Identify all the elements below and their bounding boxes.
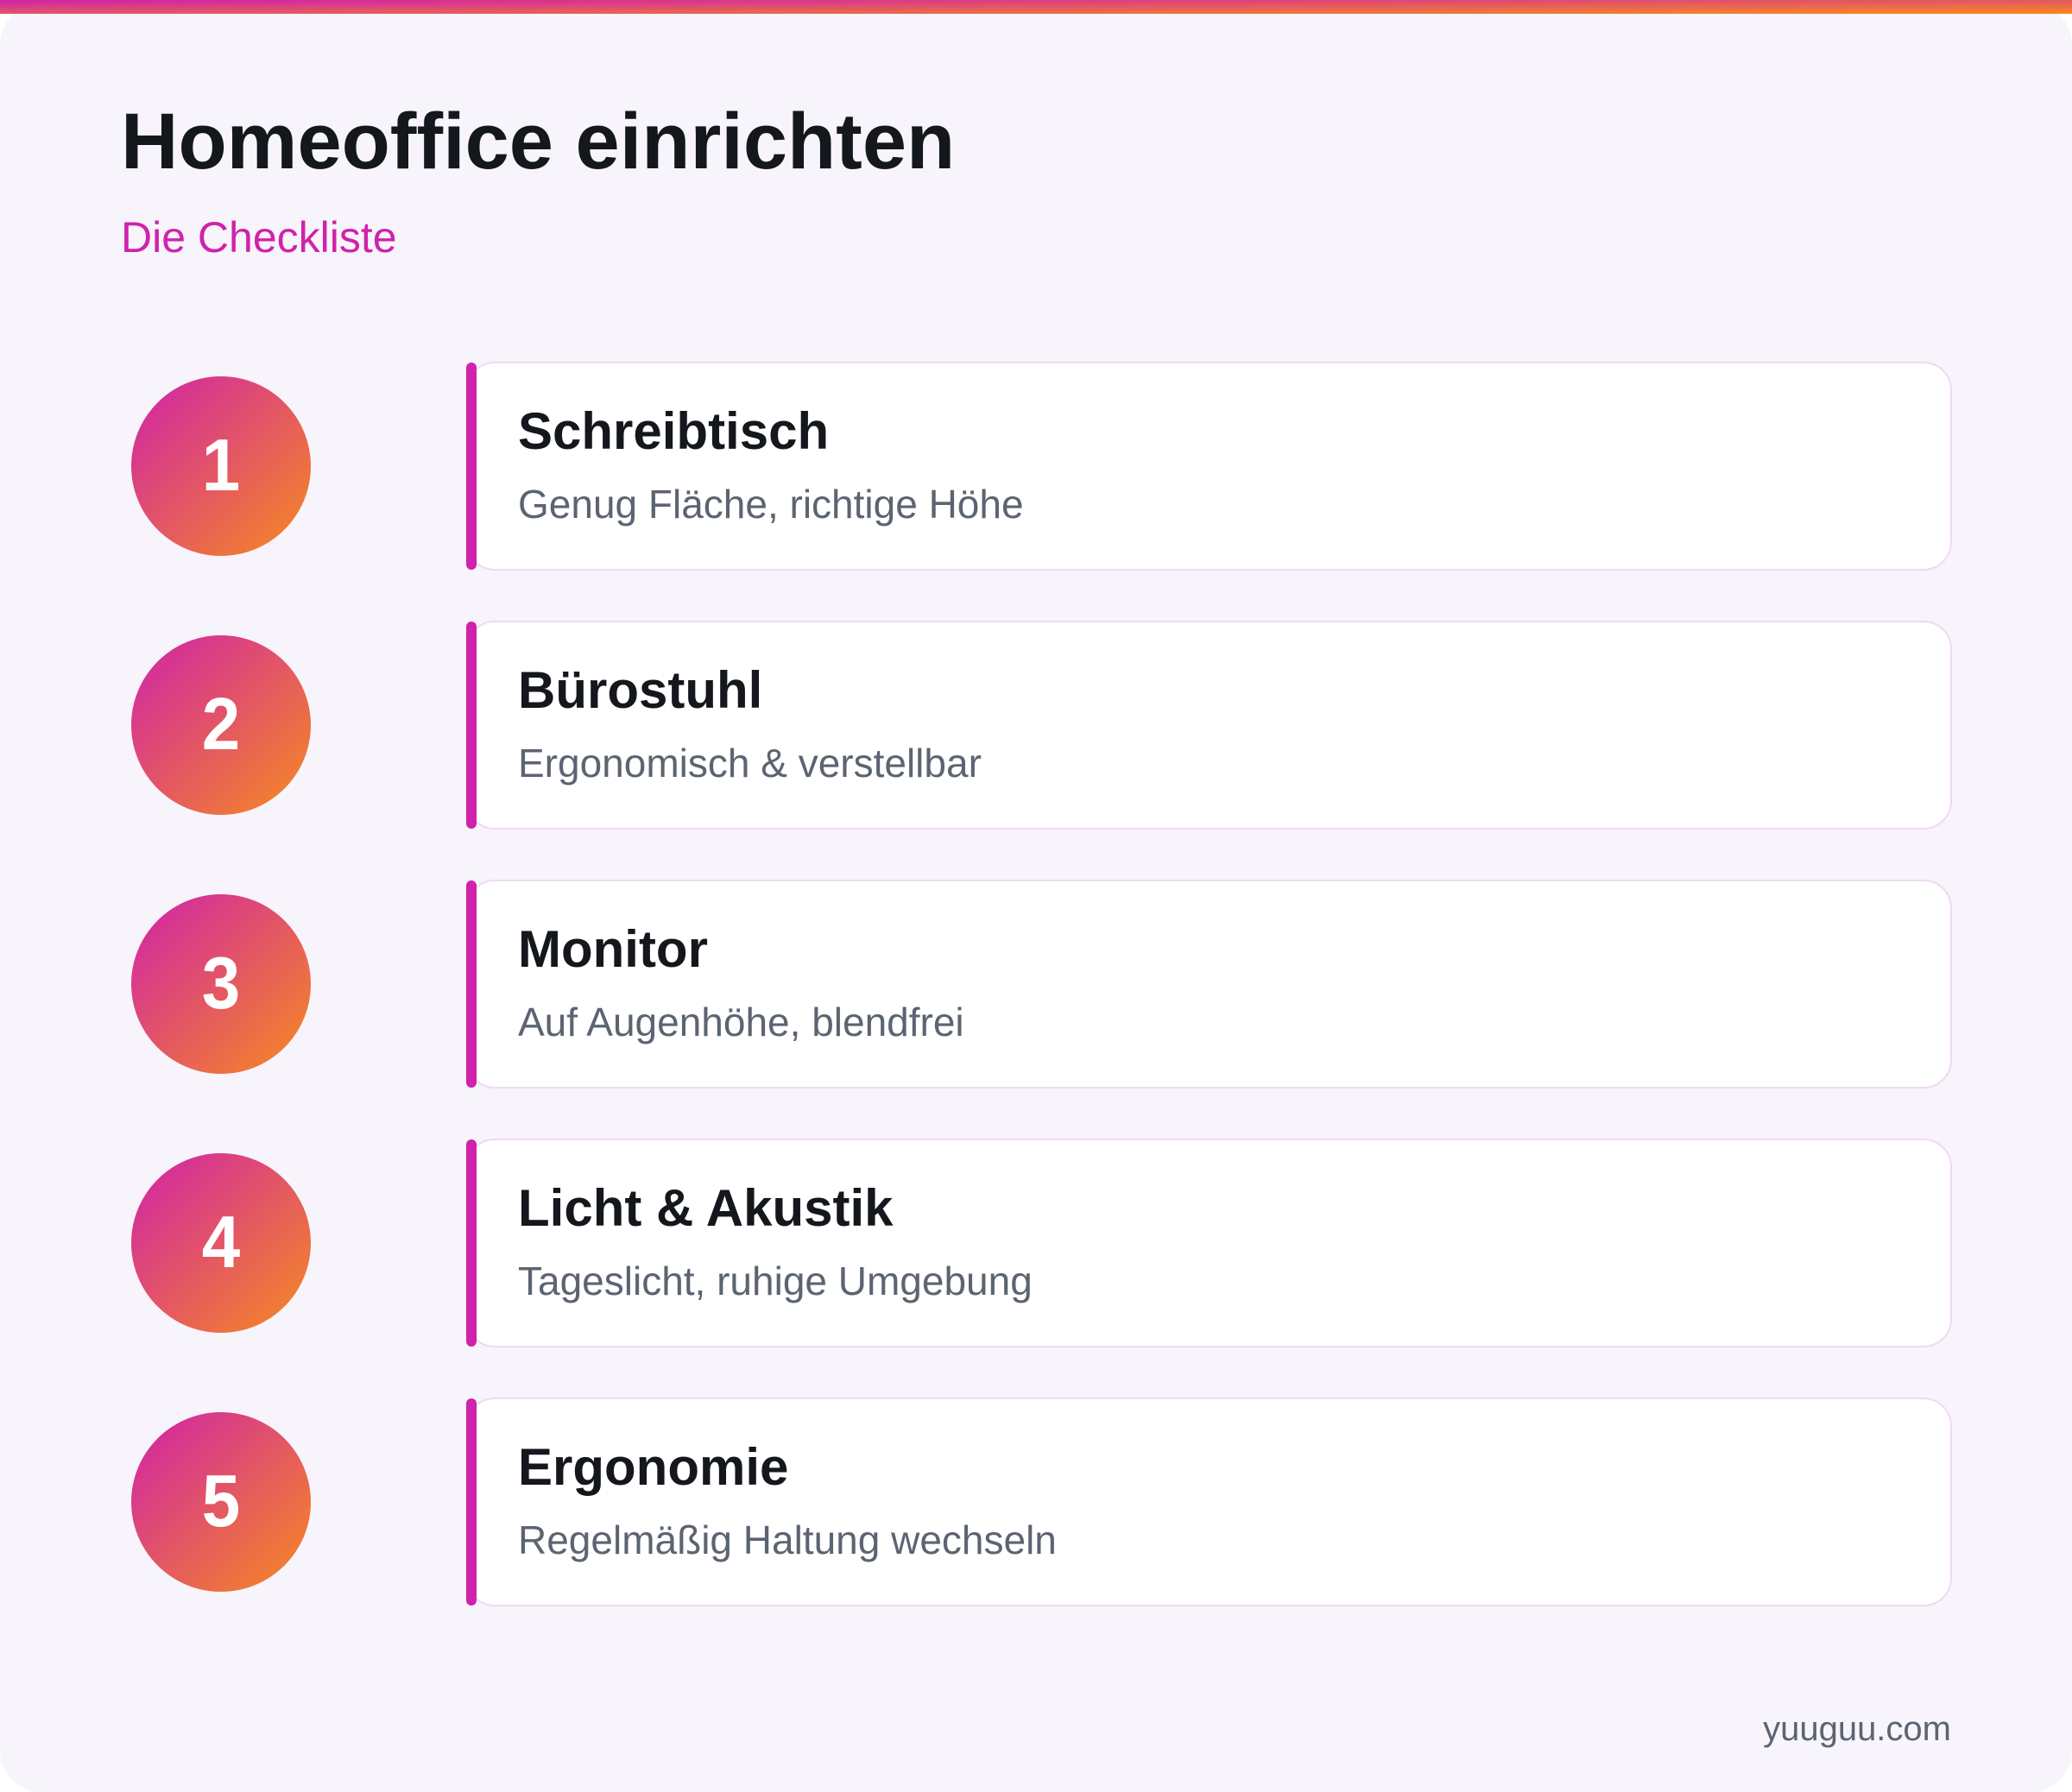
card: Ergonomie: Ergonomie — [518, 1438, 788, 1496]
checklist item 4 — [131, 1139, 1951, 1347]
card: Schreibtisch: Schreibtisch — [518, 402, 829, 460]
checklist item 3 — [131, 880, 1951, 1088]
number badge 3 — [131, 894, 311, 1074]
card: Schreibtisch — [466, 363, 1951, 570]
card: Licht & Akustik: Tageslicht, ruhige Umgebung — [518, 1259, 1033, 1303]
card: Schreibtisch: Genug Fläche, richtige Höhe — [518, 482, 1024, 527]
number badge 4 — [131, 1153, 311, 1333]
card: Monitor — [466, 880, 1951, 1088]
card: Bürostuhl: Ergonomisch & verstellbar — [518, 741, 982, 786]
card: Monitor: Monitor — [518, 920, 708, 978]
number badge 2: 2 — [202, 684, 240, 766]
number badge 3: 3 — [202, 943, 240, 1025]
footer brand: yuuguu.com — [1763, 1710, 1951, 1748]
number badge 2 — [131, 635, 311, 815]
checklist item 1 — [131, 363, 1951, 570]
card: Ergonomie: Regelmäßig Haltung wechseln — [518, 1518, 1057, 1562]
number badge 4: 4 — [202, 1202, 240, 1284]
checklist item 2 — [131, 622, 1951, 829]
number badge 1 — [131, 376, 311, 556]
number badge 5: 5 — [202, 1461, 240, 1543]
card: Bürostuhl — [466, 622, 1951, 829]
card: Licht & Akustik — [466, 1139, 1951, 1347]
title: Homeoffice einrichten — [121, 98, 955, 186]
card: Monitor: Auf Augenhöhe, blendfrei — [518, 1000, 964, 1044]
number badge 5 — [131, 1412, 311, 1592]
number badge 1: 1 — [202, 425, 240, 507]
card: Bürostuhl: Bürostuhl — [518, 661, 762, 719]
card: Licht & Akustik: Licht & Akustik — [518, 1179, 894, 1237]
subtitle: Die Checkliste — [121, 213, 397, 262]
top gradient bar — [0, 0, 2072, 14]
card: Ergonomie — [466, 1398, 1951, 1606]
checklist item 5 — [131, 1398, 1951, 1606]
